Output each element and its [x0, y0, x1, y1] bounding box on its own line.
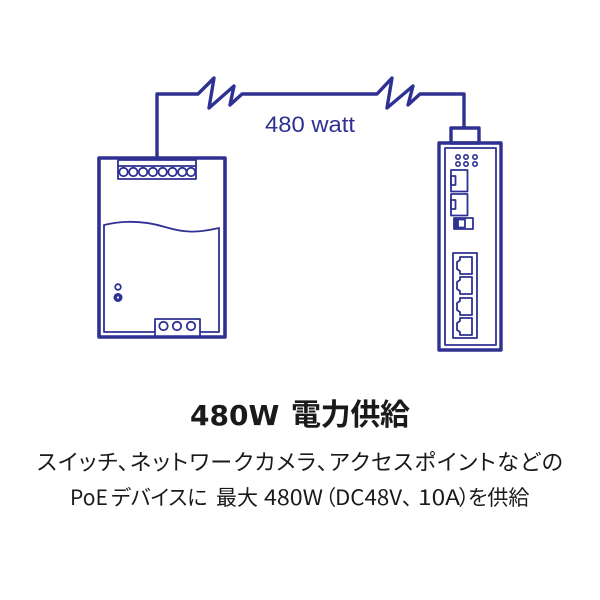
- SFP port 1: [451, 170, 468, 192]
- status LEDs: [456, 155, 477, 166]
- SFP port 2: [451, 194, 468, 216]
- description line 2: 480W: [264, 482, 323, 512]
- title: 480W: [190, 399, 279, 432]
- front panel with wavy top edge: [104, 222, 219, 332]
- description line 2: DC48V: [335, 482, 403, 512]
- status LED and trim control: [115, 284, 121, 300]
- description line 2: ）: [458, 482, 470, 512]
- bottom terminal block: [155, 319, 200, 335]
- power connector on top: [451, 128, 479, 143]
- power supply casing: [99, 158, 225, 337]
- description line 2: 、: [402, 482, 412, 512]
- description line 2: デバイスに: [111, 482, 207, 512]
- power supply unit: [99, 158, 225, 337]
- description line 2: PoE: [70, 482, 108, 512]
- label: 480 watt: 480 watt: [265, 112, 355, 137]
- RJ45 port 3: [457, 298, 472, 315]
- PoE switch device: [439, 128, 501, 350]
- RJ45 port 1: [457, 257, 472, 274]
- description line 2: を供給: [468, 482, 529, 512]
- title: 電力供給: [291, 390, 410, 434]
- RJ45 port frame: [453, 253, 477, 338]
- top terminal block: [118, 160, 196, 179]
- description line 1: スイッチ、ネットワークカメラ、アクセスポイントなどの: [37, 445, 563, 477]
- switch casing: [439, 143, 501, 350]
- description line 2: 最大: [216, 482, 258, 512]
- power cable with zigzag breaks: [157, 78, 464, 158]
- RJ45 port 2: [457, 277, 472, 294]
- inner casing outline: [445, 148, 496, 345]
- RJ45 port 4: [457, 318, 472, 335]
- description line 2: 10A: [418, 482, 460, 512]
- DIP switch: [454, 218, 473, 229]
- description line 2: （: [325, 482, 336, 512]
